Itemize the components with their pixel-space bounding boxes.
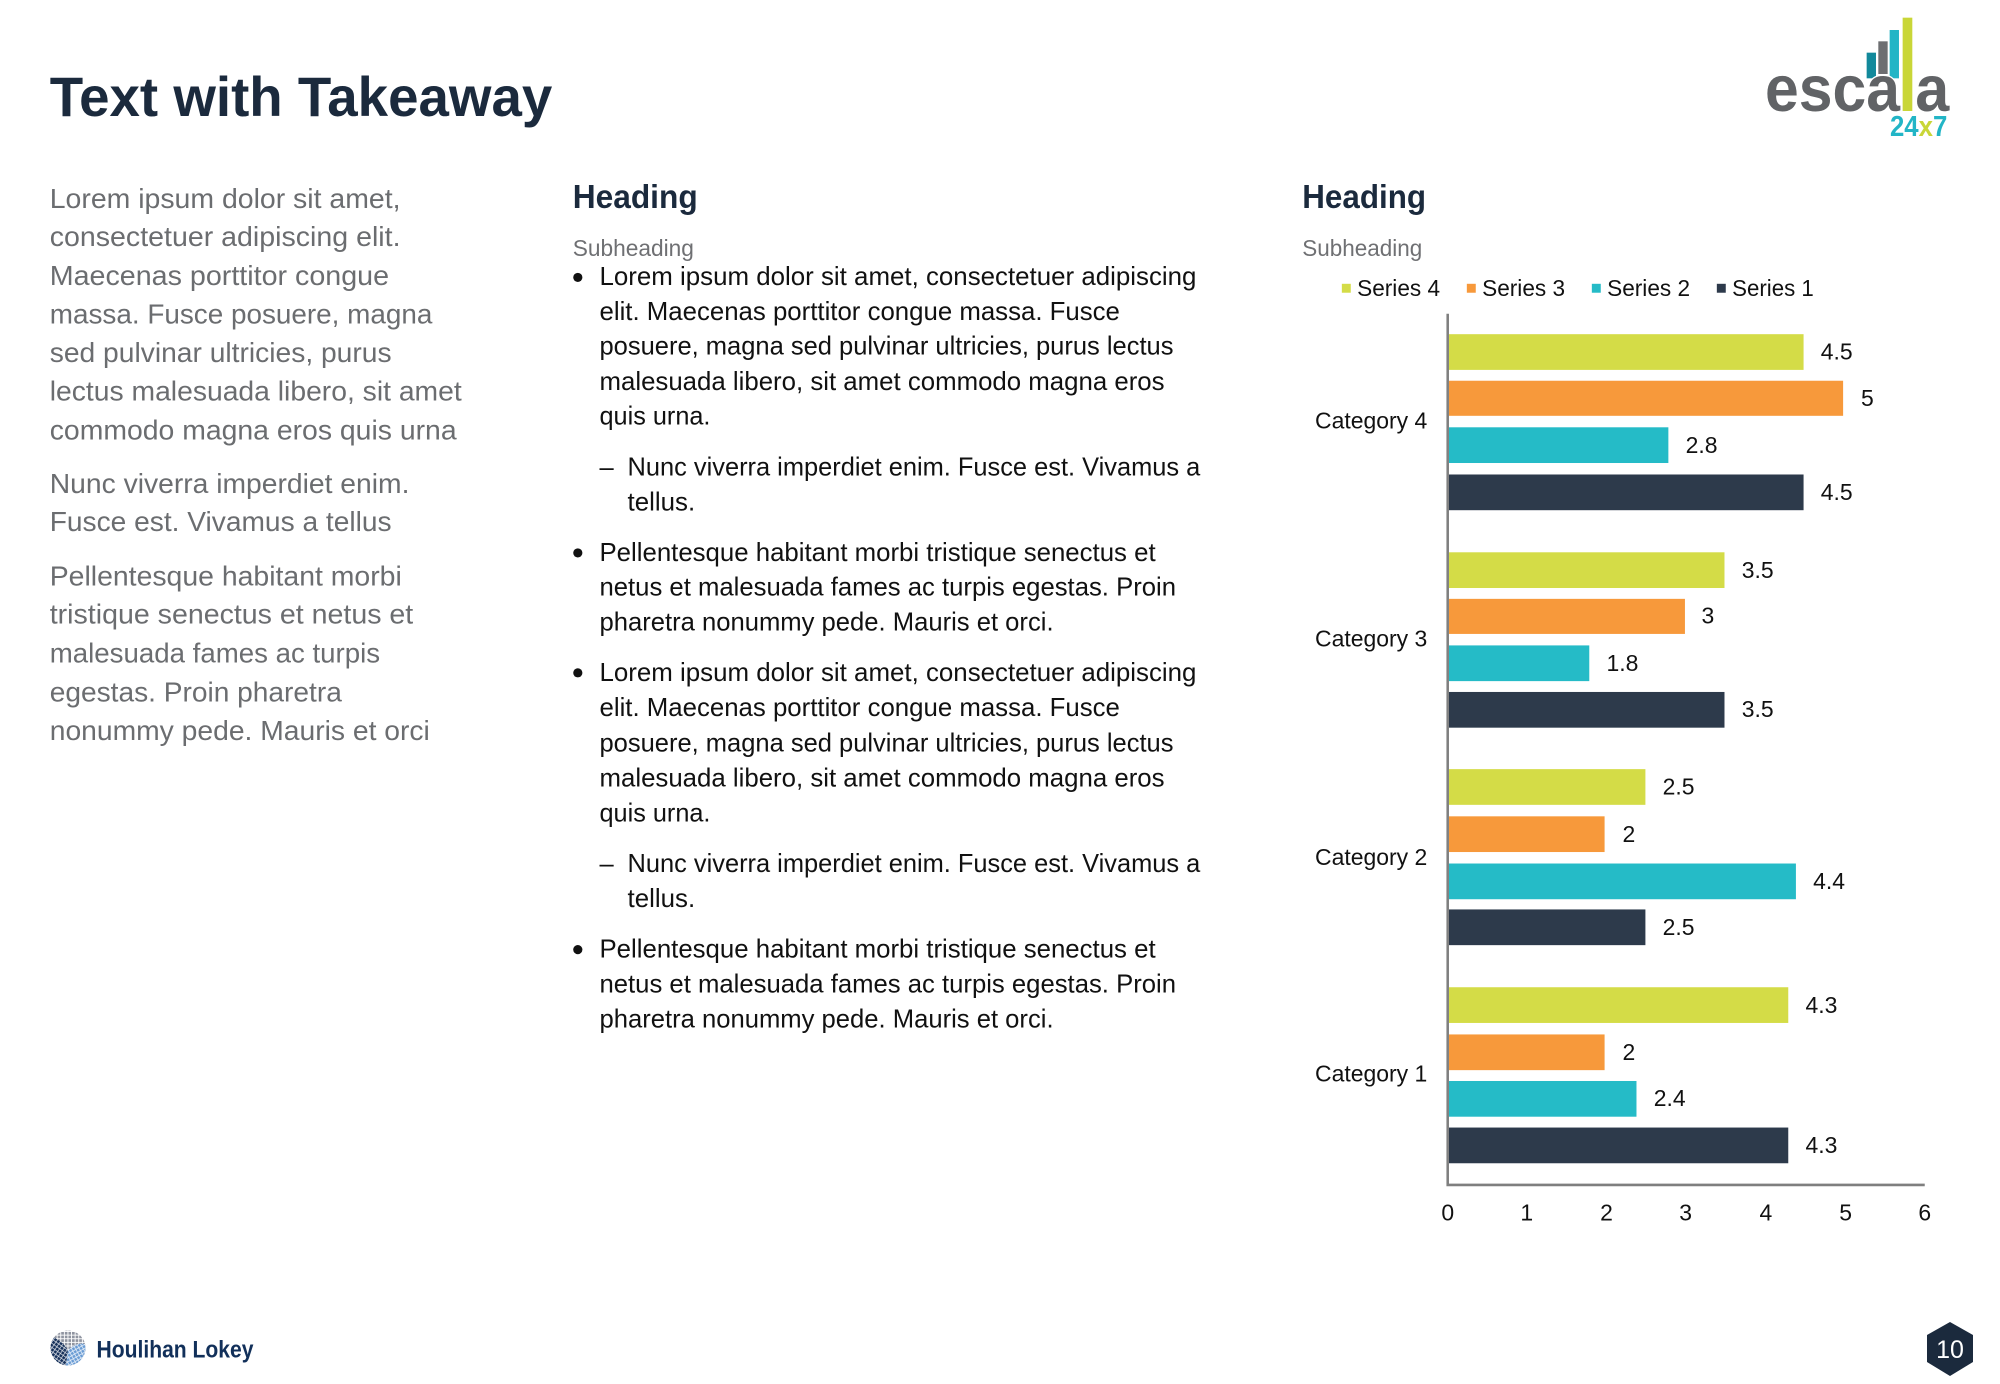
page number badge <box>1927 1322 1973 1376</box>
bullet 4: pharetra nonummy pede. Mauris et orci. <box>599 1005 1054 1033</box>
right subheading: Subheading <box>1302 235 1422 261</box>
category 2 bars: 4.4 <box>1813 868 1845 894</box>
left takeaway paragraph 1: consectetuer adipiscing elit. <box>50 221 401 252</box>
left takeaway paragraph 2: Nunc viverra imperdiet enim. <box>50 468 409 499</box>
category labels <box>1315 408 1428 1087</box>
logo: escala 24x7: esca <box>1765 52 1901 125</box>
x axis tick labels: 0 <box>1441 1200 1454 1226</box>
bullet 1: malesuada libero, sit amet commodo magna eros <box>599 368 1165 396</box>
bullet 3: Lorem ipsum dolor sit amet, consectetuer adipiscing <box>599 659 1196 687</box>
sub-bullet 2 <box>599 850 1201 913</box>
category 3 bars: 1.8 <box>1607 650 1638 676</box>
sub-bullet 2: tellus. <box>628 885 695 913</box>
category 2 bars: 2 <box>1622 821 1635 847</box>
axes <box>1448 314 1925 1185</box>
left takeaway paragraph 1: lectus malesuada libero, sit amet <box>50 376 462 407</box>
bar chart legend: Series 3 <box>1482 275 1565 301</box>
bullet 4 <box>573 936 1176 1033</box>
left takeaway paragraph 1: commodo magna eros quis urna <box>50 414 457 445</box>
x axis tick labels: 5 <box>1839 1200 1852 1226</box>
title: Text with Takeaway <box>50 66 552 128</box>
bullet 3 <box>573 659 1196 827</box>
bullet 2 <box>573 539 1176 637</box>
category 4 bars: 2.8 <box>1686 432 1717 458</box>
sub-bullet 1: tellus. <box>628 489 695 517</box>
left takeaway paragraph 2: Fusce est. Vivamus a tellus <box>50 506 392 537</box>
sub-bullet 1 <box>599 454 1201 517</box>
bar chart <box>1315 314 1931 1226</box>
category 2 bars: 2.5 <box>1663 914 1695 940</box>
bullet 3: malesuada libero, sit amet commodo magna eros <box>599 764 1165 792</box>
category 3 bars: 3.5 <box>1742 696 1774 722</box>
logo: escala 24x7 <box>1765 18 1950 143</box>
globe icon <box>51 1330 86 1366</box>
logo: escala 24x7: a <box>1915 52 1950 125</box>
x axis tick labels: 4 <box>1760 1200 1773 1226</box>
bullet 1: posuere, magna sed pulvinar ultricies, purus lectus <box>599 333 1173 361</box>
sub-bullet 1: Nunc viverra imperdiet enim. Fusce est. Vivamus a <box>628 454 1201 482</box>
bullet 1: Lorem ipsum dolor sit amet, consectetuer adipiscing <box>599 263 1196 291</box>
x axis tick labels: 3 <box>1679 1200 1692 1226</box>
left takeaway paragraph 3 <box>50 560 430 746</box>
bullet 2: Pellentesque habitant morbi tristique senectus et <box>599 539 1156 567</box>
bar chart legend: Series 1 <box>1732 275 1814 301</box>
left takeaway paragraph 3: malesuada fames ac turpis <box>50 638 380 669</box>
right heading: Heading <box>1302 179 1426 216</box>
bullet 3: elit. Maecenas porttitor congue massa. Fusce <box>599 694 1120 722</box>
x axis tick labels <box>1441 1200 1931 1226</box>
category 3 bars: 3.5 <box>1742 557 1774 583</box>
logo: escala 24x7: 24x7 <box>1890 111 1947 143</box>
left takeaway paragraph 1 <box>50 183 462 445</box>
bullet 1: quis urna. <box>599 403 710 431</box>
sub-bullet 1: – <box>599 454 614 482</box>
left takeaway paragraph 3: egestas. Proin pharetra <box>50 677 342 708</box>
x axis tick labels: 6 <box>1918 1200 1931 1226</box>
bullet list <box>573 263 1201 1033</box>
category 1 bars: 2 <box>1622 1039 1635 1065</box>
middle heading: Heading <box>573 179 698 216</box>
category 2 bars: 2.5 <box>1663 774 1695 800</box>
footer logo: Houlihan Lokey <box>51 1330 254 1366</box>
bullet 4: Pellentesque habitant morbi tristique senectus et <box>599 936 1156 964</box>
bullet 3: posuere, magna sed pulvinar ultricies, purus lectus <box>599 729 1173 757</box>
category labels: Category 1 <box>1315 1061 1427 1087</box>
category 4 bars <box>1449 334 1874 510</box>
category 1 bars: 4.3 <box>1805 1132 1837 1158</box>
x axis tick labels: 1 <box>1520 1200 1533 1226</box>
bar chart legend <box>1342 275 1814 301</box>
left takeaway paragraph 3: tristique senectus et netus et <box>50 599 414 630</box>
x axis tick labels: 2 <box>1600 1200 1613 1226</box>
bullet 3: quis urna. <box>599 799 710 827</box>
bullet 2: netus et malesuada fames ac turpis egestas. Proin <box>599 574 1176 602</box>
category 3 bars <box>1449 552 1774 728</box>
left takeaway paragraph 3: nonummy pede. Mauris et orci <box>50 715 430 746</box>
left takeaway paragraph 1: sed pulvinar ultricies, purus <box>50 337 392 368</box>
bullet 4: netus et malesuada fames ac turpis egestas. Proin <box>599 970 1176 998</box>
bar chart legend: Series 2 <box>1607 275 1690 301</box>
middle subheading: Subheading <box>573 235 694 261</box>
left takeaway paragraph 3: Pellentesque habitant morbi <box>50 560 402 591</box>
sub-bullet 2: Nunc viverra imperdiet enim. Fusce est. Vivamus a <box>628 850 1201 878</box>
bullet 1: elit. Maecenas porttitor congue massa. Fusce <box>599 298 1120 326</box>
left takeaway paragraph 1: Lorem ipsum dolor sit amet, <box>50 183 401 214</box>
category 4 bars: 4.5 <box>1821 339 1853 365</box>
left takeaway paragraph 2 <box>50 468 409 537</box>
category 4 bars: 5 <box>1861 385 1874 411</box>
bullet 1 <box>573 263 1196 431</box>
category 4 bars: 4.5 <box>1821 479 1853 505</box>
category 3 bars: 3 <box>1702 603 1714 629</box>
category 1 bars: 2.4 <box>1654 1085 1686 1111</box>
page number badge: 10 <box>1936 1336 1964 1364</box>
company name: Houlihan Lokey <box>97 1336 254 1363</box>
bullet 2: pharetra nonummy pede. Mauris et orci. <box>599 609 1054 637</box>
bar chart legend: Series 4 <box>1357 275 1440 301</box>
category labels: Category 4 <box>1315 408 1428 434</box>
sub-bullet 2: – <box>599 850 614 878</box>
left takeaway paragraph 1: massa. Fusce posuere, magna <box>50 298 433 329</box>
left takeaway paragraph 1: Maecenas porttitor congue <box>50 260 389 291</box>
category labels: Category 3 <box>1315 626 1427 652</box>
category labels: Category 2 <box>1315 844 1427 870</box>
category 1 bars <box>1449 987 1837 1163</box>
category 1 bars: 4.3 <box>1805 992 1837 1018</box>
category 2 bars <box>1449 769 1845 945</box>
